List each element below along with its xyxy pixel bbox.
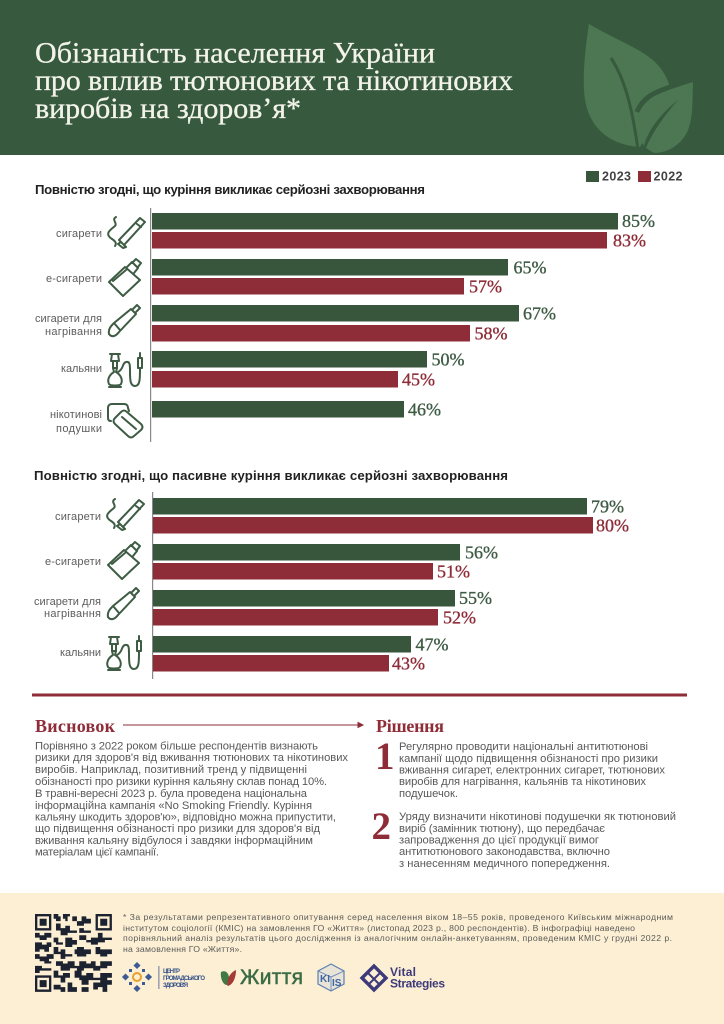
footnote: на замовлення ГО «Життя». xyxy=(123,944,242,954)
conclusion text: Порівняно з 2022 роком більше респондентів визнають xyxy=(35,740,318,752)
solution 2: 2 xyxy=(372,805,391,848)
solution 1: 1 xyxy=(375,735,394,778)
solution 2: з нанесенням медичного попередження. xyxy=(399,858,610,870)
row: nicotine pouches: 46% xyxy=(408,400,441,420)
solution 1: кампанії щодо підвищення обізнаності про ризики xyxy=(399,753,658,765)
icon: cigarette xyxy=(108,217,145,248)
legend: 2023 xyxy=(602,170,631,184)
heading: solutions: Рішення xyxy=(376,716,444,736)
solution 1: подушечок. xyxy=(399,788,458,800)
conclusion panel xyxy=(35,716,363,858)
row: cigarettes: 79% xyxy=(591,496,624,516)
heading: conclusion: Висновок xyxy=(35,716,116,736)
icon: pouches xyxy=(108,404,142,438)
row: heated cigarettes: 52% xyxy=(443,608,476,628)
bar chart: smoking causes serious disease xyxy=(35,208,655,442)
row: cigarettes: 83% xyxy=(613,230,646,250)
row: hookah: 50% xyxy=(432,350,464,370)
icon: leaves xyxy=(584,24,693,153)
row: e-cigarettes: 51% xyxy=(437,562,470,582)
row: heated cigarettes xyxy=(35,304,556,344)
heading: chart 2: Повністю згодні, що пасивне куріння викликає серйозні захворювання xyxy=(34,468,508,483)
arrow xyxy=(123,722,363,728)
conclusion text: В травні-вересні 2023 р. була проведена національна xyxy=(35,788,308,800)
conclusion text: ризики для здоров'я від вживання тютюнових та нікотинових xyxy=(35,752,348,764)
row: hookah xyxy=(61,350,464,390)
logo: Vital Strategies: Strategies xyxy=(390,976,445,990)
row: nicotine pouches xyxy=(50,400,441,438)
divider line xyxy=(32,694,687,696)
row: heated cigarettes: 58% xyxy=(474,324,508,344)
icon: hookah xyxy=(107,636,141,670)
footnote: інститутом соціології (КМІС) на замовлення ГО «Життя» (листопад 2023 р., 800 респондентів). В інфографіці наведено xyxy=(123,923,635,933)
row: e-cigarettes: е-сигарети xyxy=(45,556,101,568)
icon: hookah xyxy=(108,353,142,387)
footnote: * За результатами репрезентативного опитування серед населення віком 18–55 років, проведеного Київським міжнародним xyxy=(123,912,673,922)
row: e-cigarettes xyxy=(46,258,546,296)
logo: Zhyttia: Життя xyxy=(240,966,303,989)
title: про вплив тютюнових та нікотинових xyxy=(35,64,513,97)
row: heated cigarettes: сигарети для xyxy=(34,596,101,608)
conclusion text: що підвищення обізнаності про ризики для здоров'я від xyxy=(35,823,320,835)
logo: KIIS xyxy=(318,964,344,991)
row: hookah: 45% xyxy=(402,370,435,390)
bar chart: passive smoking causes serious disease xyxy=(34,492,629,679)
row: e-cigarettes: е-сигарети xyxy=(46,273,102,285)
legend xyxy=(586,170,683,184)
solution 2: Уряду визначити нікотинові подушечки як тютюновий xyxy=(399,811,676,823)
icon: e-cigarette xyxy=(108,542,140,579)
solution 1: Регулярно проводити національні антитютюнові xyxy=(399,741,648,753)
logo: Vital Strategies xyxy=(361,965,445,991)
solution 2 xyxy=(372,805,676,870)
row: hookah: кальяни xyxy=(60,647,101,659)
row: cigarettes: сигарети xyxy=(56,228,102,240)
row: e-cigarettes: 65% xyxy=(514,258,546,278)
title xyxy=(35,36,513,125)
icon: e-cigarette xyxy=(109,259,141,296)
conclusion text: кальяну шкодить здоров'ю», відповідно можна припустити, xyxy=(35,812,336,824)
footer panel xyxy=(0,893,724,1024)
row: e-cigarettes: 57% xyxy=(469,276,502,296)
row: heated cigarettes: 67% xyxy=(523,304,556,324)
conclusion text xyxy=(35,740,348,858)
title: виробів на здоров’я* xyxy=(35,92,301,125)
row: cigarettes xyxy=(56,211,655,250)
row: hookah: 43% xyxy=(392,654,425,674)
row: heated cigarettes: нагрівання xyxy=(44,608,101,620)
row: hookah: кальяни xyxy=(61,363,102,375)
title: Обізнаність населення України xyxy=(35,36,435,70)
conclusion text: вживання кальяну відбулося і завдяки інформаційним xyxy=(35,835,313,847)
logo: Public Health Center: ЦЕНТР xyxy=(163,969,180,975)
row: heated cigarettes xyxy=(34,588,492,628)
solution 2: антитютюнового законодавства, включно xyxy=(399,846,610,858)
logo: KIIS: IS xyxy=(332,978,342,989)
row: hookah: 47% xyxy=(416,634,448,654)
footnote xyxy=(123,912,673,954)
row: e-cigarettes xyxy=(45,542,498,582)
row: nicotine pouches: подушки xyxy=(56,423,102,435)
logo: Public Health Center: ГРОМАДСЬКОГО xyxy=(163,976,205,982)
icon: cigarette xyxy=(107,499,144,530)
row: heated cigarettes: 55% xyxy=(459,588,492,608)
QR code xyxy=(35,914,112,992)
row: e-cigarettes: 56% xyxy=(465,542,498,562)
row: nicotine pouches: нікотинові xyxy=(50,409,102,421)
row: cigarettes: 80% xyxy=(596,516,629,536)
solution 1: вживання сигарет, електронних сигарет, тютюнових xyxy=(399,764,665,776)
icon: heated tobacco xyxy=(108,588,139,619)
conclusion text: виробів. Наприклад, позитивний тренд у підвищенні xyxy=(35,764,307,776)
solution 2: запровадження до цієї продукції вимог xyxy=(399,834,599,846)
conclusion text: інформаційна кампанія «No Smoking Friendly. Куріння xyxy=(35,800,312,812)
footnote: порівняльний аналіз результатів цього дослідження із аналогічним онлайн-анкетуванням, проведеним КМІС у грудні 2022 р. xyxy=(123,933,672,943)
header banner xyxy=(0,0,724,155)
legend: 2022 xyxy=(654,170,683,184)
solutions panel xyxy=(372,716,676,870)
logo: KIIS: KI xyxy=(320,974,330,985)
conclusion text: обізнаності про ризики куріння кальяну склав понад 10%. xyxy=(35,776,327,788)
row: cigarettes xyxy=(55,496,629,536)
heading: chart 1: Повністю згодні, що куріння викликає серйозні захворювання xyxy=(35,182,425,197)
solution 1 xyxy=(375,735,665,800)
solution 2: виріб (замінник тютюну), що передбачає xyxy=(399,823,605,835)
logo: Vital Strategies: Vital xyxy=(390,965,416,979)
logo: Public Health Center: ЗДОРОВ'Я xyxy=(163,983,188,989)
row: heated cigarettes: нагрівання xyxy=(45,326,102,338)
row: heated cigarettes: сигарети для xyxy=(35,313,102,325)
logo: Public Health Center xyxy=(122,962,205,992)
icon: heated tobacco xyxy=(109,305,140,336)
row: cigarettes: сигарети xyxy=(55,511,101,523)
row: cigarettes: 85% xyxy=(622,211,655,231)
conclusion text: матеріалам цієї кампанії. xyxy=(35,846,159,858)
row: hookah xyxy=(60,634,448,674)
solution 1: виробів для нагрівання, кальянів та нікотинових xyxy=(399,776,646,788)
